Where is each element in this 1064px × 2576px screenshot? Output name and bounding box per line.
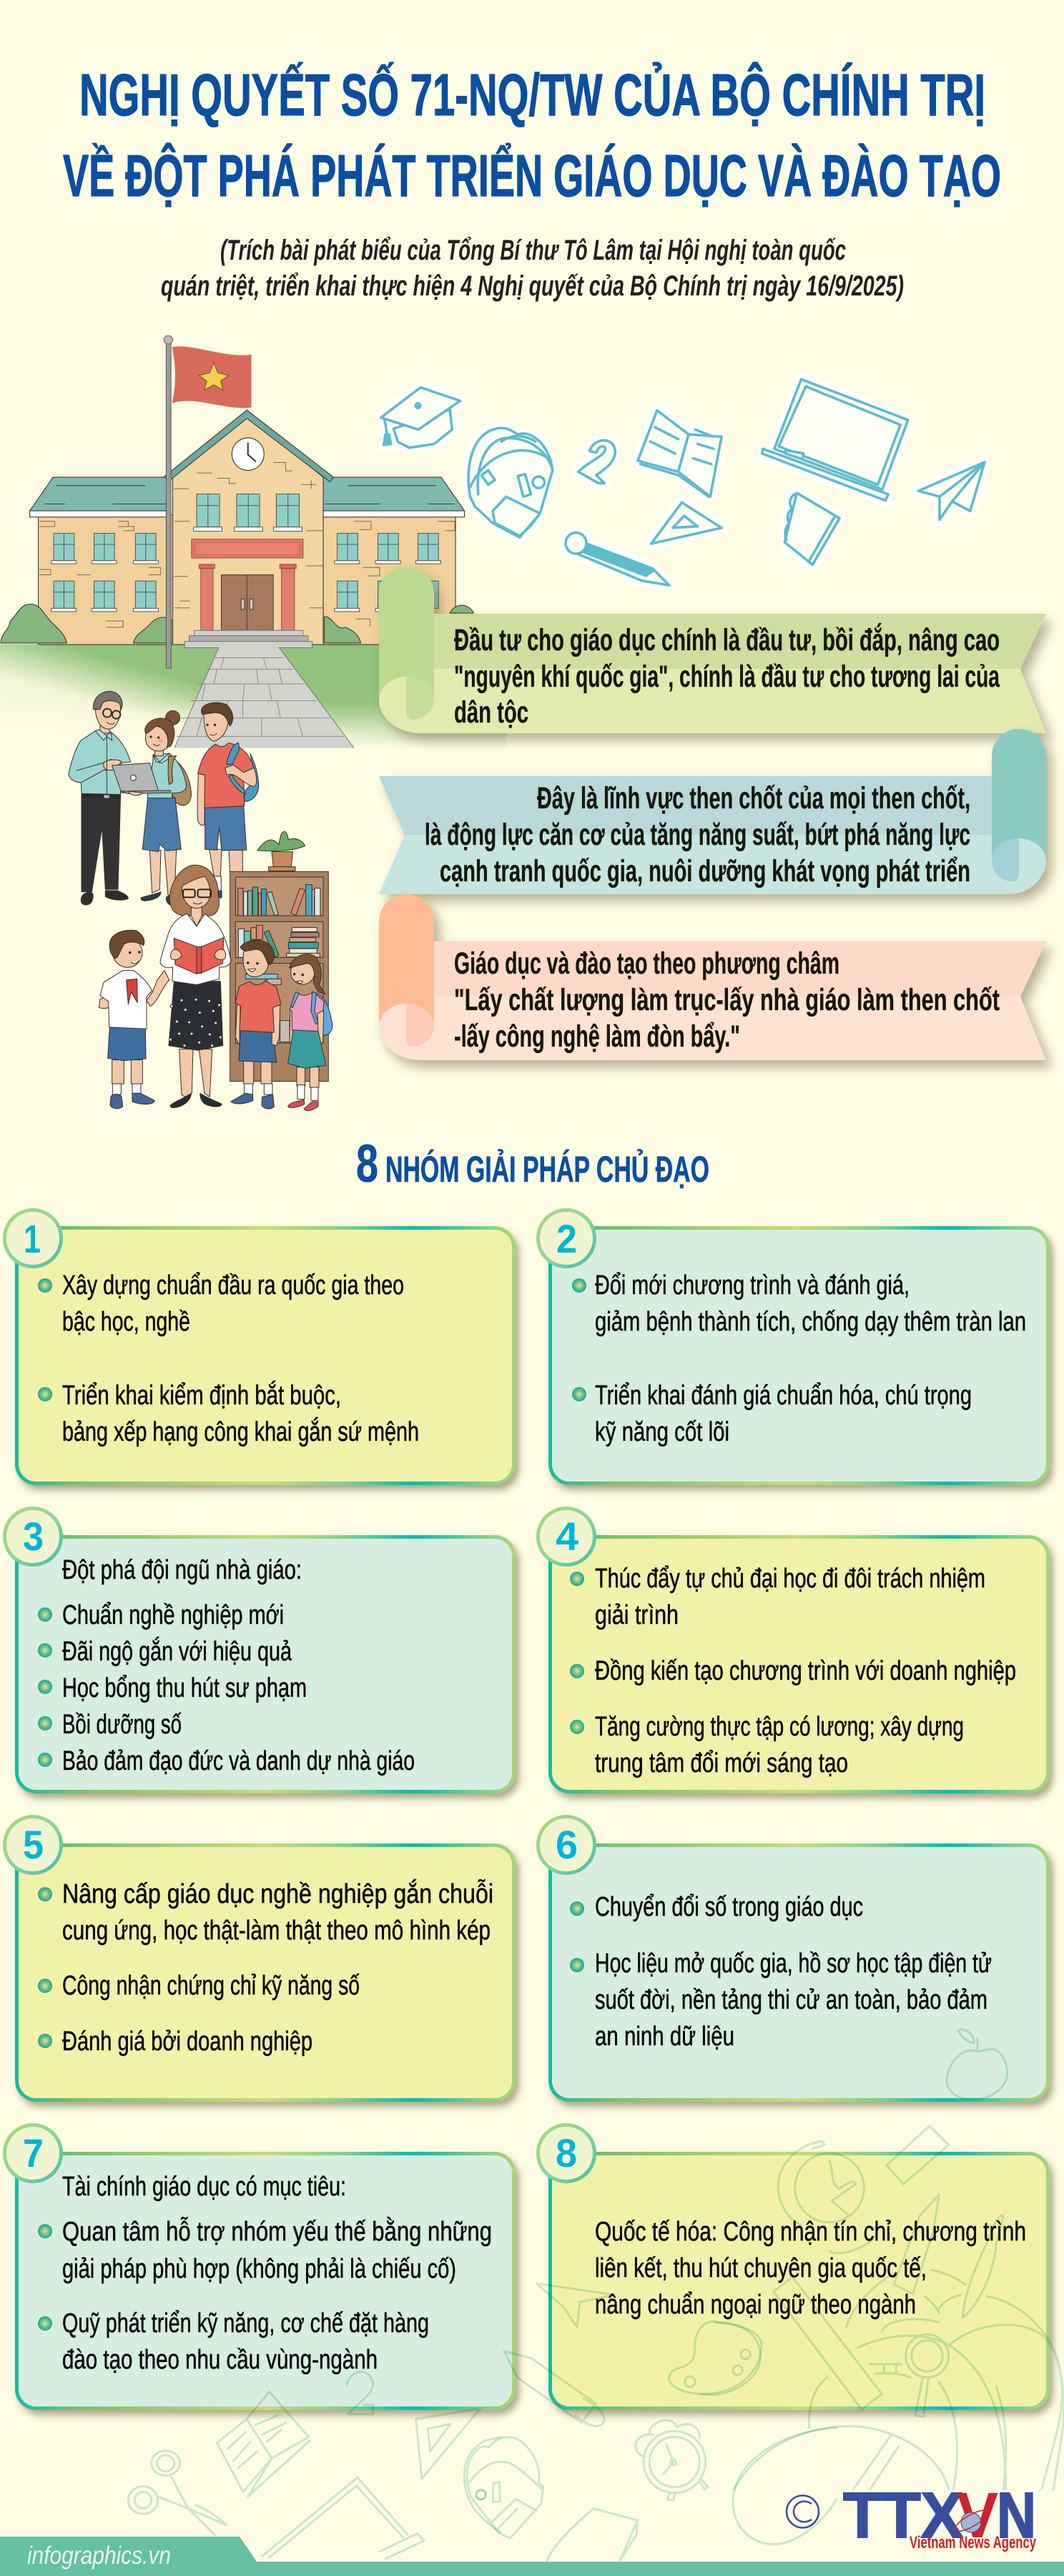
- card 7 text: giải pháp phù hợp (không phải là chiếu cố): [62, 2254, 456, 2284]
- logo: TTXVN Vietnam News Agency: [787, 2480, 1036, 2552]
- ribbon 3: peach: [379, 894, 1046, 1060]
- card 1 text: [62, 1270, 419, 1447]
- number badge 7: [4, 2125, 61, 2182]
- card 7 box: [17, 2153, 513, 2408]
- watermark: paper plane: [536, 2283, 614, 2327]
- number badge 6: 6: [556, 1822, 578, 1867]
- card 3 text: Bảo đảm đạo đức và danh dự nhà giáo: [62, 1746, 415, 1776]
- card 6 text: Chuyển đổi số trong giáo dục: [595, 1892, 863, 1922]
- male teacher: [69, 691, 131, 905]
- footer bar with site tab: [0, 2537, 1064, 2576]
- ribbon 2: teal: [379, 729, 1046, 894]
- heading: 8 groups of solutions: NHÓM GIẢI PHÁP CHỦ ĐẠO: [385, 1148, 709, 1190]
- card 6 text: [595, 1892, 992, 2052]
- card 5 box: [17, 1846, 513, 2100]
- number badge 2: 2: [556, 1216, 577, 1261]
- card 1 text: bảng xếp hạng công khai gắn sứ mệnh: [62, 1416, 419, 1447]
- card 5 text: Công nhận chứng chỉ kỹ năng số: [62, 1971, 360, 2001]
- decorative school doodles: [381, 379, 985, 585]
- bullets card 2: [572, 1278, 586, 1401]
- pupil boy with red scarf: [99, 930, 169, 1109]
- icon: set square: [651, 502, 721, 544]
- ribbon 1: green: [379, 567, 1046, 733]
- icon: notebook: [784, 493, 839, 564]
- icon: backpack: [468, 428, 553, 537]
- card 5 text: cung ứng, học thật-làm thật theo mô hình kép: [62, 1916, 491, 1946]
- illustration: school building: [0, 410, 506, 749]
- ribbon 1: green: dân tộc: [454, 695, 528, 730]
- watermark doodles near bottom centre: [467, 2321, 837, 2561]
- illustration: bookcase, teacher and pupils: [99, 831, 332, 1110]
- number badge 3: [4, 1508, 61, 1565]
- card 1 text: Triển khai kiểm định bắt buộc,: [62, 1380, 341, 1411]
- female teacher with book: [160, 865, 231, 1107]
- bullets card 1: [38, 1278, 52, 1401]
- copyright mark: [787, 2495, 819, 2528]
- card 3 box: [17, 1537, 513, 1791]
- card 8 text: liên kết, thu hút chuyên gia quốc tế,: [595, 2253, 927, 2283]
- number badge 1: 1: [24, 1216, 41, 1261]
- potted plant: [257, 831, 305, 871]
- bullets card 5: [38, 1887, 52, 2048]
- card 1 text: bậc học, nghề: [62, 1307, 190, 1337]
- card 4 text: [595, 1564, 1016, 1778]
- card 4 text: trung tâm đổi mới sáng tạo: [595, 1748, 848, 1778]
- ribbon 3: peach: -lấy công nghệ làm đòn bẩy.": [454, 1019, 740, 1054]
- number badge 8: 8: [556, 2130, 577, 2175]
- card 4 box: [551, 1537, 1048, 1791]
- watermark doodles near bottom left: [128, 2372, 501, 2559]
- card 2 text: kỹ năng cốt lõi: [595, 1417, 729, 1447]
- number badge 2: [538, 1210, 595, 1266]
- card 7 text: đào tạo theo nhu cầu vùng-ngành: [62, 2345, 378, 2375]
- card 6 box: [551, 1846, 1048, 2100]
- female student: [141, 710, 191, 905]
- male student: [197, 702, 259, 898]
- ribbon 3: peach: Giáo dục và đào tạo theo phương châm: [454, 946, 839, 981]
- card 5 text: Nâng cấp giáo dục nghề nghiệp gắn chuỗi: [62, 1879, 493, 1909]
- number badge 3: 3: [23, 1514, 44, 1559]
- number badge 6: [538, 1817, 595, 1873]
- flag pole and flag: [164, 336, 252, 668]
- card 8 box: [551, 2153, 1048, 2408]
- card 3 text: Bồi dưỡng số: [62, 1710, 182, 1740]
- illustration: teacher and two students with laptop: [69, 691, 259, 905]
- number badge 8: [538, 2125, 595, 2182]
- card 3 text: Đột phá đội ngũ nhà giáo:: [62, 1555, 302, 1585]
- number badge 7: 7: [23, 2130, 44, 2175]
- bookcase: [230, 871, 328, 1082]
- number badge 5: 5: [23, 1822, 44, 1867]
- card 2 text: [595, 1270, 1026, 1447]
- bullets card 3: [38, 1607, 52, 1767]
- stone path: [174, 647, 354, 748]
- watermark: apple on card 6: [947, 2029, 1008, 2099]
- icon: paper plane: [918, 462, 985, 519]
- bushes: [1, 604, 473, 643]
- number badge 4: [538, 1508, 595, 1565]
- logo: TTXVN Vietnam News Agency: TTX: [843, 2480, 963, 2552]
- card 8 text: nâng chuẩn ngoại ngữ theo ngành: [595, 2290, 916, 2320]
- icon: open book: [638, 411, 721, 496]
- card 2 box: [551, 1228, 1048, 1484]
- heading: 8 groups of solutions: 8: [356, 1134, 378, 1193]
- card 2 text: Đổi mới chương trình và đánh giá,: [595, 1270, 910, 1301]
- card 1 box: [17, 1228, 513, 1484]
- pupil girl with backpack: [288, 954, 332, 1110]
- title: [63, 62, 1001, 209]
- pupil boy in red shirt: [231, 940, 281, 1109]
- card 6 text: an ninh dữ liệu: [595, 2022, 734, 2052]
- icon: number two: [578, 441, 615, 484]
- logo: TTXVN Vietnam News Agency: V: [957, 2480, 998, 2552]
- number badge 1: [4, 1210, 61, 1266]
- right wing: [323, 477, 465, 645]
- icon: pencil: [566, 533, 669, 585]
- card 5 text: Đánh giá bởi doanh nghiệp: [62, 2027, 312, 2057]
- card 5 text: [62, 1879, 493, 2057]
- bullets card 6: [570, 1901, 584, 1972]
- card 7 text: Tài chính giáo dục có mục tiêu:: [62, 2172, 346, 2202]
- card 1 text: Xây dựng chuẩn đầu ra quốc gia theo: [62, 1270, 404, 1301]
- card 4 text: giải trình: [595, 1600, 679, 1630]
- card 3 text: Đãi ngộ gắn với hiệu quả: [62, 1636, 292, 1667]
- number badge 4: 4: [556, 1514, 578, 1559]
- watermark doodles near bottom right and on card 8: [701, 2126, 1064, 2489]
- bullets card 7: [38, 2224, 52, 2331]
- laptop: [112, 763, 170, 795]
- footer bar with site tab: infographics.vn: [27, 2542, 171, 2570]
- central block with gable and clock: [164, 410, 333, 647]
- left wing: [30, 477, 173, 645]
- card backgrounds: [17, 1228, 1048, 2408]
- logo: TTXVN Vietnam News Agency: N: [997, 2480, 1036, 2552]
- card 3 text: Chuẩn nghề nghiệp mới: [62, 1600, 284, 1630]
- heading: 8 groups of solutions: [356, 1134, 709, 1193]
- card 7 text: Quỹ phát triển kỹ năng, cơ chế đặt hàng: [62, 2308, 429, 2339]
- grass lawn: [0, 644, 506, 749]
- card 3 text: [62, 1555, 415, 1776]
- card 7 text: Quan tâm hỗ trợ nhóm yếu thế bằng những: [62, 2216, 492, 2247]
- number badge 5: [4, 1817, 61, 1873]
- icon: blackboard: [762, 379, 908, 501]
- subtitle: [161, 235, 904, 302]
- icon: graduation cap: [381, 388, 460, 448]
- card 8 text: [595, 2217, 1026, 2320]
- card 3 text: Học bổng thu hút sư phạm: [62, 1673, 307, 1703]
- card 7 text: [62, 2172, 492, 2375]
- bullets card 4: [570, 1572, 584, 1734]
